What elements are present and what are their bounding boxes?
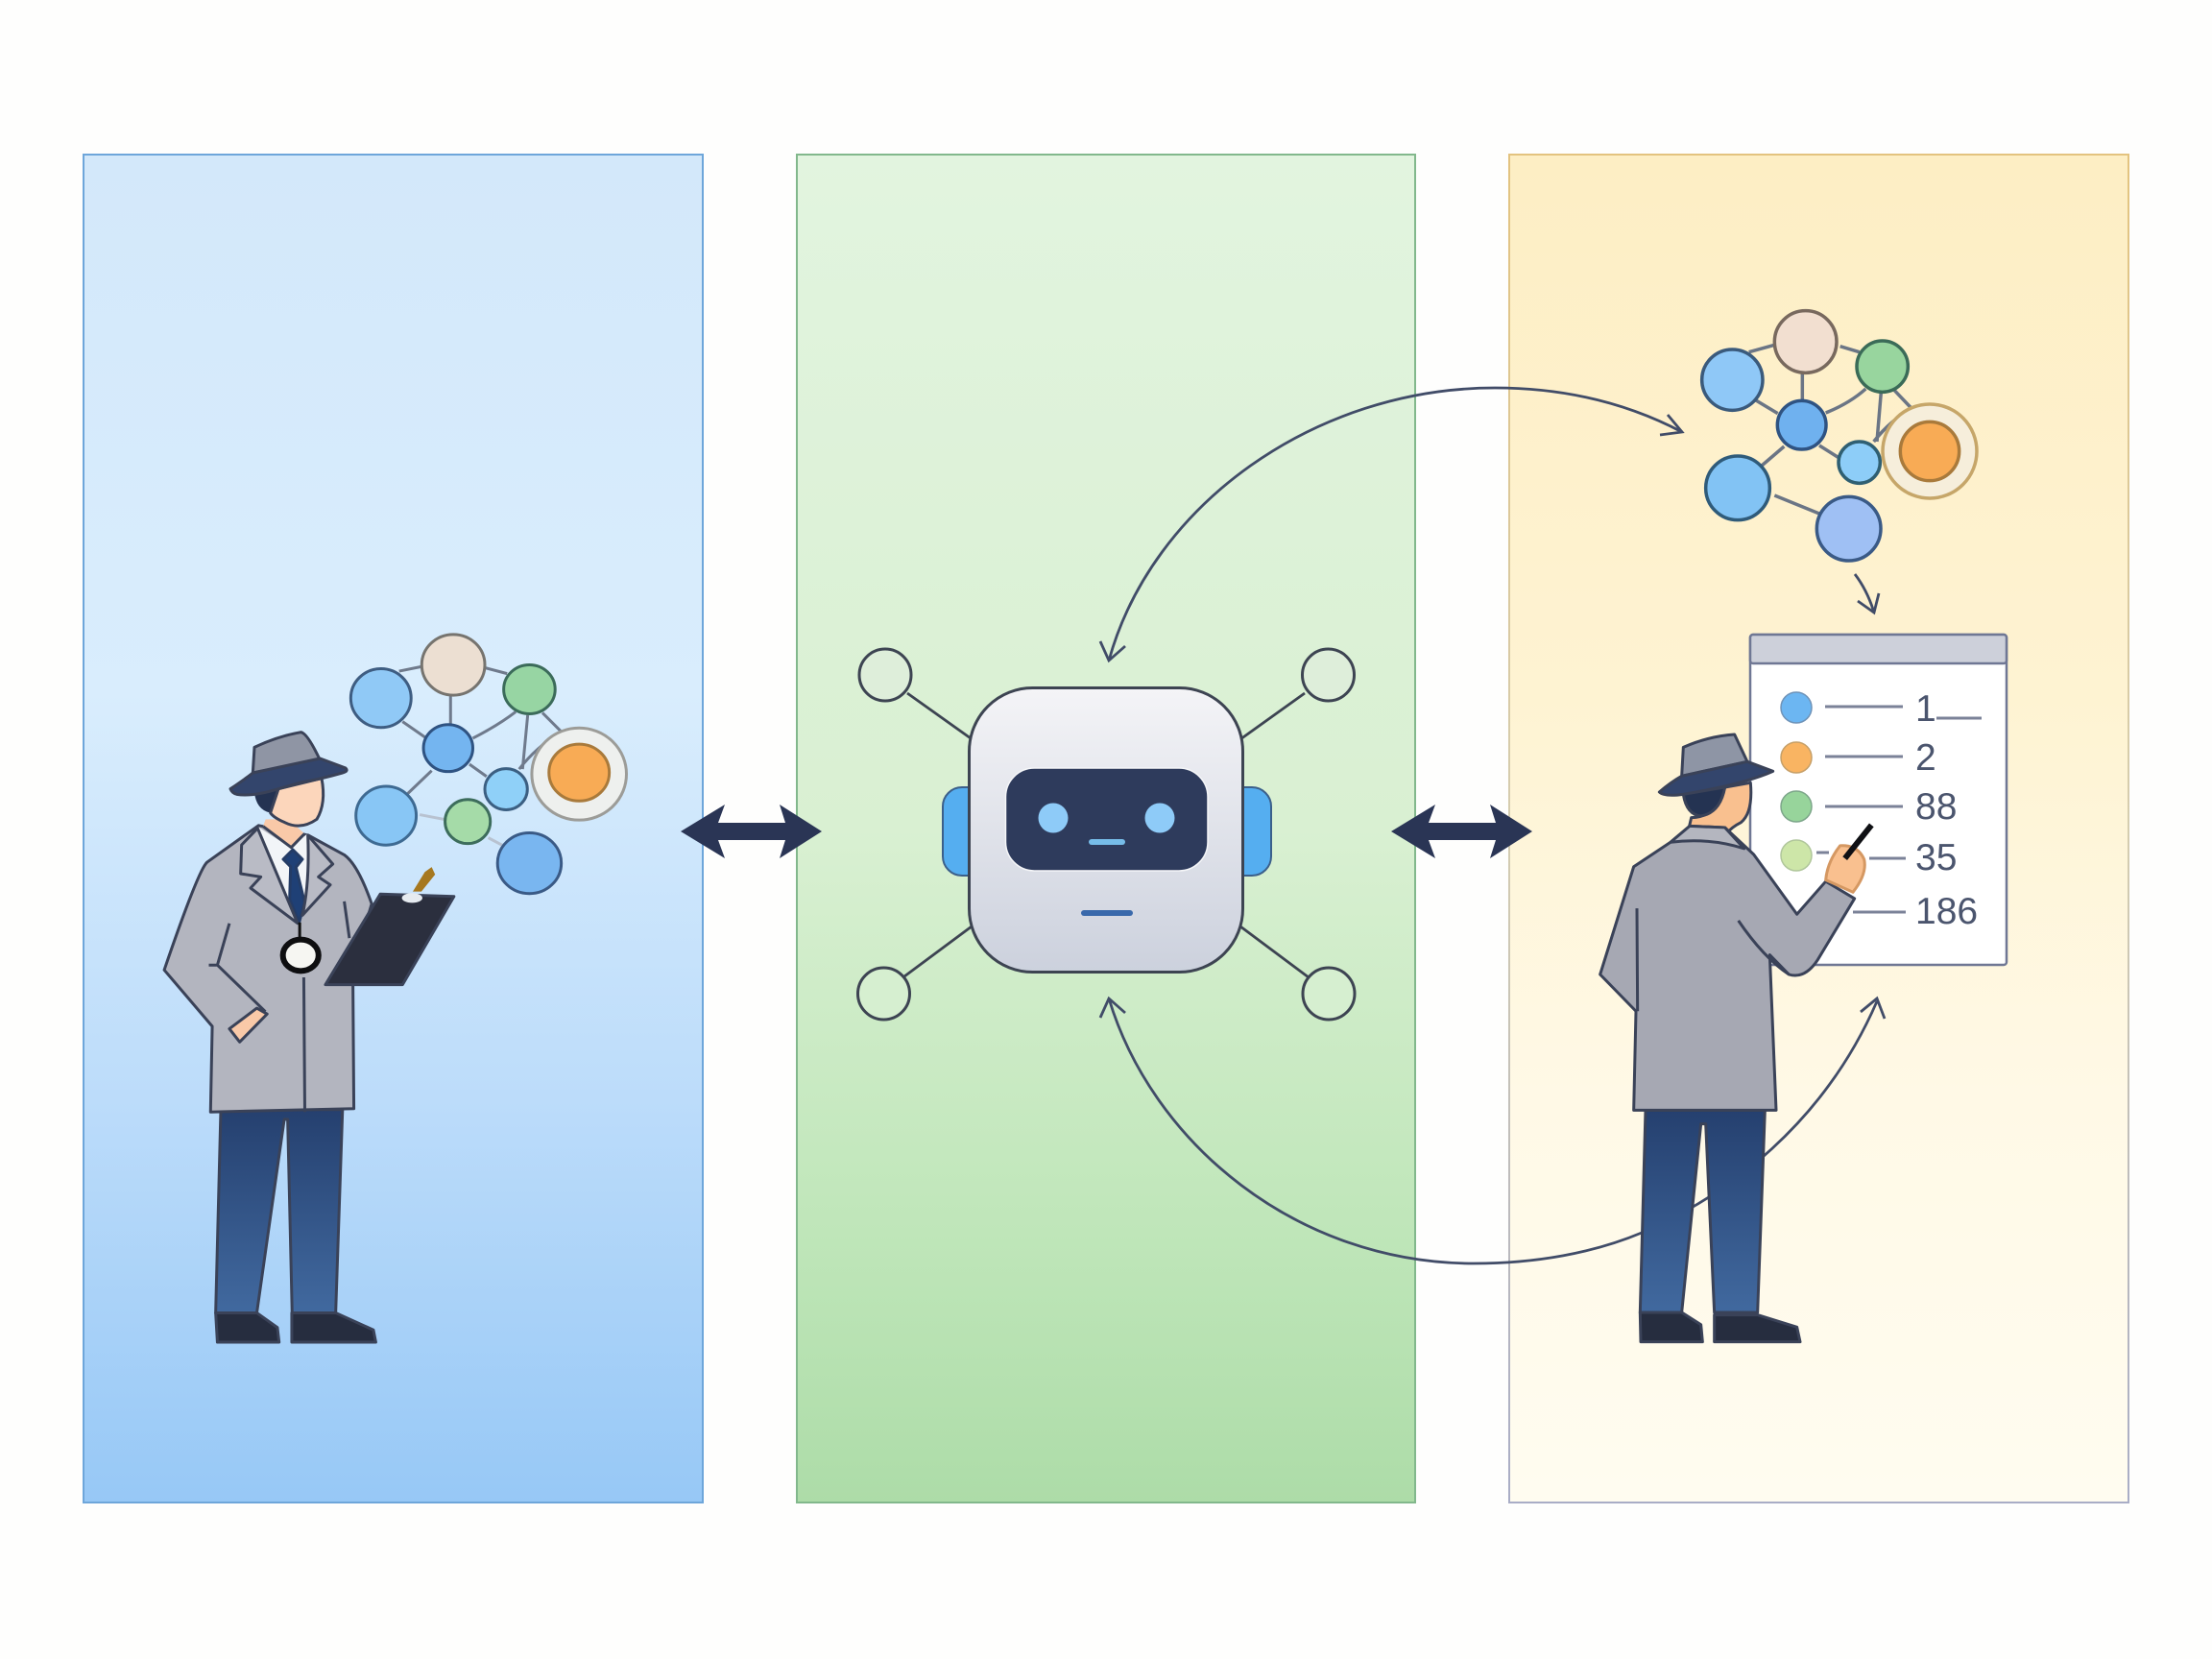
robot chin line [1081,910,1133,916]
face [271,779,324,826]
hair [254,787,280,813]
robot eyes [1039,803,1068,833]
hair [1683,787,1725,816]
coat seams [208,902,349,1112]
list numbers: 1 [1915,688,1936,730]
connector lines [904,693,1309,977]
shoes [1640,1312,1800,1342]
network graph: right panel [1702,311,1977,561]
head, hat and collar [230,733,347,924]
list numbers [1915,688,1978,932]
clipboard clip [402,893,422,902]
list dots [1781,692,1812,871]
hand [1826,846,1864,892]
arrow: small arrow from graph to list [1855,574,1879,613]
neck [263,819,304,848]
coat [164,826,372,1112]
panel: green AI panel [797,155,1415,1503]
list numbers: 88 [1915,786,1957,828]
ranked list board [1750,635,2007,965]
lapels [241,829,333,924]
shirt [258,828,309,923]
figure: detective seen from behind pointing at list [1600,734,1871,1342]
robot screen [1006,768,1208,871]
hand in pocket [229,1008,267,1042]
list numbers: 186 [1915,891,1978,932]
highlighted orange node [1883,404,1977,498]
coat collar [1671,826,1744,849]
tie [283,850,304,923]
list numbers: 2 [1915,737,1936,779]
robot with four connector nodes [858,649,1355,1020]
arrow: double arrow between middle and right panels [1391,805,1532,858]
panel: yellow results panel [1509,155,2128,1503]
panel: blue detective panel [84,155,703,1503]
magnifier pendant [283,923,319,971]
shoes [216,1312,375,1342]
arrow: upper curved arrow from graph to robot [1100,388,1682,661]
head and hat [1659,734,1773,833]
board body [1750,635,2007,965]
figure: detective with clipboard [164,733,454,1342]
list lines [1816,707,1982,912]
trousers [1640,1110,1765,1312]
hat crown [1682,734,1747,776]
pen [413,867,435,892]
trousers [216,1110,343,1312]
connector nodes [858,649,1355,1020]
hat crown [252,733,320,773]
hat brim [230,758,347,795]
board header [1750,635,2007,663]
hat brim [1659,761,1773,795]
arrow: lower curved arrow from robot to list [1100,998,1885,1263]
coat [1600,826,1855,1110]
robot mouth [1089,839,1125,845]
face and neck [1689,782,1751,833]
highlighted orange node [532,728,626,820]
network graph: left panel [350,635,626,894]
pointer [1845,825,1871,858]
coat seams [1637,908,1789,1011]
clipboard [325,894,454,985]
list numbers: 35 [1915,837,1957,878]
robot head [970,687,1242,972]
robot ears [943,787,991,876]
arrow: double arrow between left and middle panels [681,805,822,858]
